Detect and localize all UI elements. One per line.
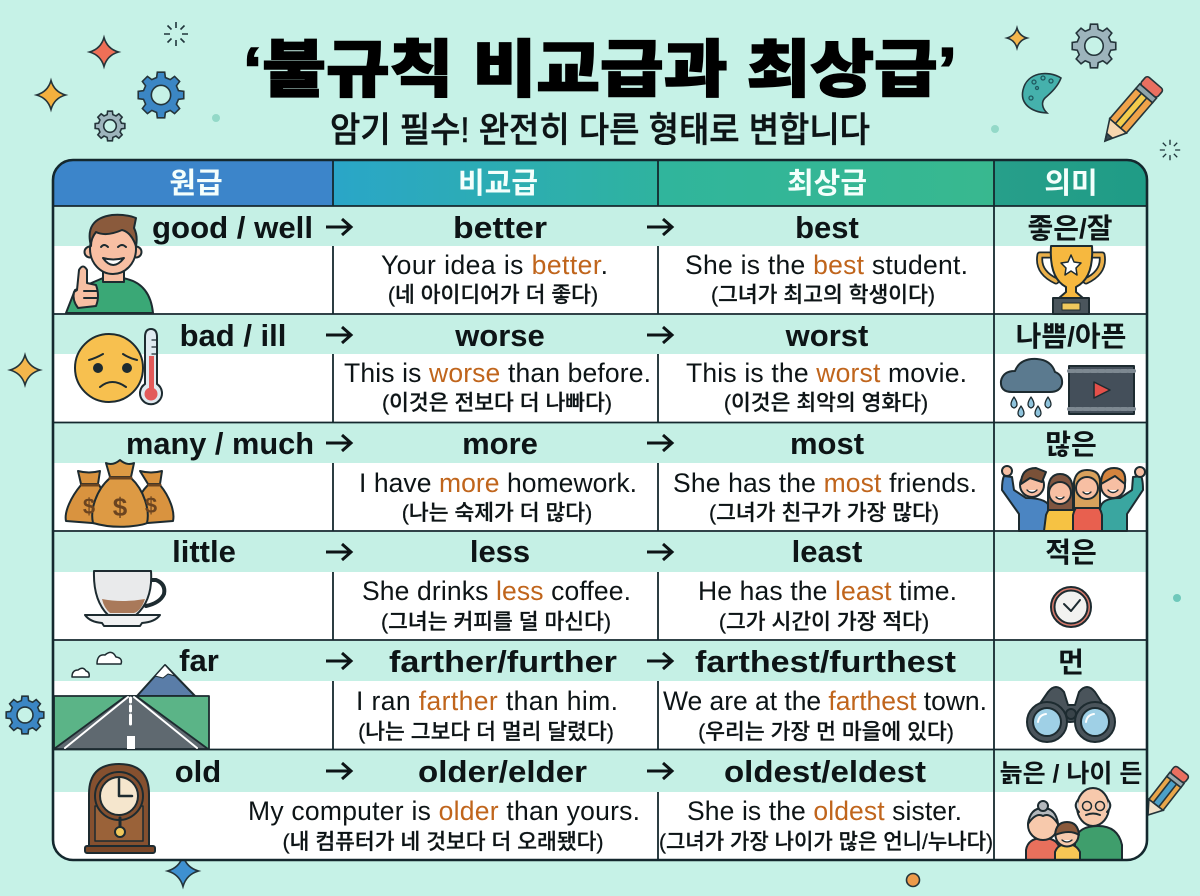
table header: 원급 <box>169 167 223 200</box>
row 5: far: (나는 그보다 더 멀리 달렸다) <box>358 720 614 744</box>
row 4: little <box>172 534 1097 634</box>
row tints and grid <box>53 206 1147 860</box>
row 3: many: many / much <box>126 426 314 461</box>
table header: 최상급 <box>787 167 867 200</box>
row 3: many: She has the most friends. <box>673 468 977 498</box>
row 3: many: 많은 <box>1045 429 1097 460</box>
row 1: good: She is the best student. <box>685 250 968 280</box>
row 1: good: better <box>453 210 547 245</box>
row 1: good: (그녀가 최고의 학생이다) <box>711 283 935 307</box>
row 6: old: old <box>175 754 221 789</box>
row 2: bad: worse <box>454 318 545 353</box>
row 5: far: I ran farther than him. <box>356 686 618 716</box>
icon: money bags: $ <box>145 493 157 518</box>
row 1: good: 좋은/잘 <box>1027 213 1113 244</box>
row 1: good: good / well <box>152 210 313 245</box>
row 6: old: 늙은 / 나이 든 <box>1000 760 1142 788</box>
decorations: sides and bottom <box>6 355 1190 886</box>
icon: binoculars <box>1027 687 1115 742</box>
icon: sad face with thermometer <box>75 329 162 404</box>
row 6: old <box>175 754 1142 854</box>
row 4: little: 적은 <box>1045 537 1097 568</box>
arrow <box>647 219 672 235</box>
arrow <box>647 653 672 669</box>
row 5: far: 먼 <box>1058 647 1084 678</box>
table header <box>53 160 1147 206</box>
icon: money bags <box>66 460 173 527</box>
arrow <box>326 327 351 343</box>
row 2: bad: worst <box>785 318 868 353</box>
row 1: good: (네 아이디어가 더 좋다) <box>388 283 598 307</box>
row 6: old: oldest/eldest <box>724 754 926 789</box>
arrow <box>326 544 351 560</box>
row 2: bad: bad / ill <box>180 318 286 353</box>
arrow <box>647 763 672 779</box>
row 4: little: (그녀는 커피를 덜 마신다) <box>381 610 611 634</box>
row 2: bad: This is the worst movie. <box>686 358 967 388</box>
decorations: top left <box>36 22 220 141</box>
table header: 비교급 <box>458 167 538 200</box>
icon: happy group <box>1002 466 1145 531</box>
row 3: many: (그녀가 친구가 가장 많다) <box>709 501 939 525</box>
row 2: bad: 나쁨/아픈 <box>1016 321 1126 352</box>
decorations: top right <box>991 24 1180 160</box>
row 5: far: far <box>179 643 219 678</box>
row 1: good: best <box>795 210 859 245</box>
row 4: little: little <box>172 534 236 569</box>
arrow <box>647 544 672 560</box>
row 3: many: (나는 숙제가 더 많다) <box>402 501 592 525</box>
row 3: many <box>126 426 1097 525</box>
row 4: little: least <box>792 534 862 569</box>
row 4: little: She drinks less coffee. <box>362 576 631 606</box>
icon: trophy <box>1040 246 1102 314</box>
arrow <box>647 435 672 451</box>
icon: grandparents and child <box>1026 788 1122 860</box>
row 4: little: He has the least time. <box>698 576 957 606</box>
row 2: bad <box>180 318 1126 415</box>
row 2: bad: This is worse than before. <box>344 358 651 388</box>
arrow <box>326 435 351 451</box>
arrow <box>326 219 351 235</box>
row 5: far: (우리는 가장 먼 마을에 있다) <box>698 720 954 744</box>
row 3: many: most <box>790 426 864 461</box>
row 3: many: more <box>462 426 538 461</box>
row 5: far <box>179 643 1084 744</box>
row 5: far: farther/further <box>389 644 617 679</box>
arrow <box>647 327 672 343</box>
row 1: good: Your idea is better. <box>381 250 608 280</box>
table border <box>53 160 1147 860</box>
row 6: old: My computer is older than yours. <box>248 796 640 826</box>
arrow <box>326 653 351 669</box>
row 2: bad: (이것은 최악의 영화다) <box>724 391 928 415</box>
icon: money bags: $ <box>83 494 95 519</box>
row 6: old: older/elder <box>418 754 587 789</box>
title: ‘불규칙 비교급과 최상급’ <box>243 36 957 105</box>
subtitle: 암기 필수! 완전히 다른 형태로 변합니다 <box>330 111 870 150</box>
row 2: bad: (이것은 전보다 더 나빠다) <box>382 391 612 415</box>
row 6: old: (내 컴퓨터가 네 것보다 더 오래됐다) <box>282 830 604 854</box>
row 3: many: I have more homework. <box>359 468 637 498</box>
icon: road and mountain <box>54 652 209 749</box>
table header: 의미 <box>1044 167 1098 200</box>
icon: coffee cup <box>85 571 164 626</box>
icon: thumbs-up man <box>66 215 153 313</box>
row 5: far: farthest/furthest <box>695 644 956 679</box>
icon: rain cloud and film <box>1001 359 1134 417</box>
row 5: far: We are at the farthest town. <box>663 686 987 716</box>
icon: small clock <box>1051 587 1091 627</box>
row 6: old: She is the oldest sister. <box>687 796 962 826</box>
row 4: little: (그가 시간이 가장 적다) <box>719 610 929 634</box>
row 6: old: (그녀가 가장 나이가 많은 언니/누나다) <box>659 830 993 854</box>
row 1: good <box>152 210 1113 307</box>
table <box>53 160 1147 860</box>
row 4: little: less <box>470 534 530 569</box>
arrow <box>326 763 351 779</box>
icon: mantel clock <box>85 764 155 853</box>
icon: money bags: $ <box>113 492 128 522</box>
